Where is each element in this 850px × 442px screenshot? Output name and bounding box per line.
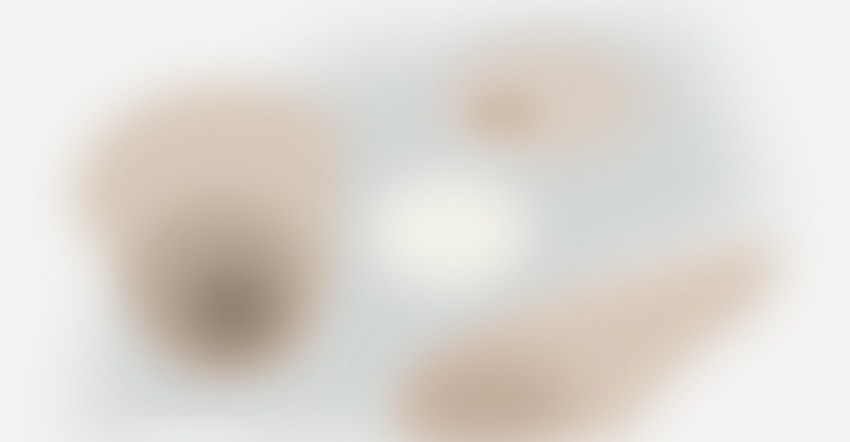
top right tan ellipse xyxy=(440,38,650,162)
left tan blob xyxy=(75,85,346,366)
bottom left pale edge xyxy=(120,428,260,442)
white centre glow xyxy=(370,174,530,290)
grey-blue central surface xyxy=(70,20,770,442)
dark brown shadow in left blob xyxy=(130,200,314,370)
bottom right tan blob xyxy=(395,240,778,442)
